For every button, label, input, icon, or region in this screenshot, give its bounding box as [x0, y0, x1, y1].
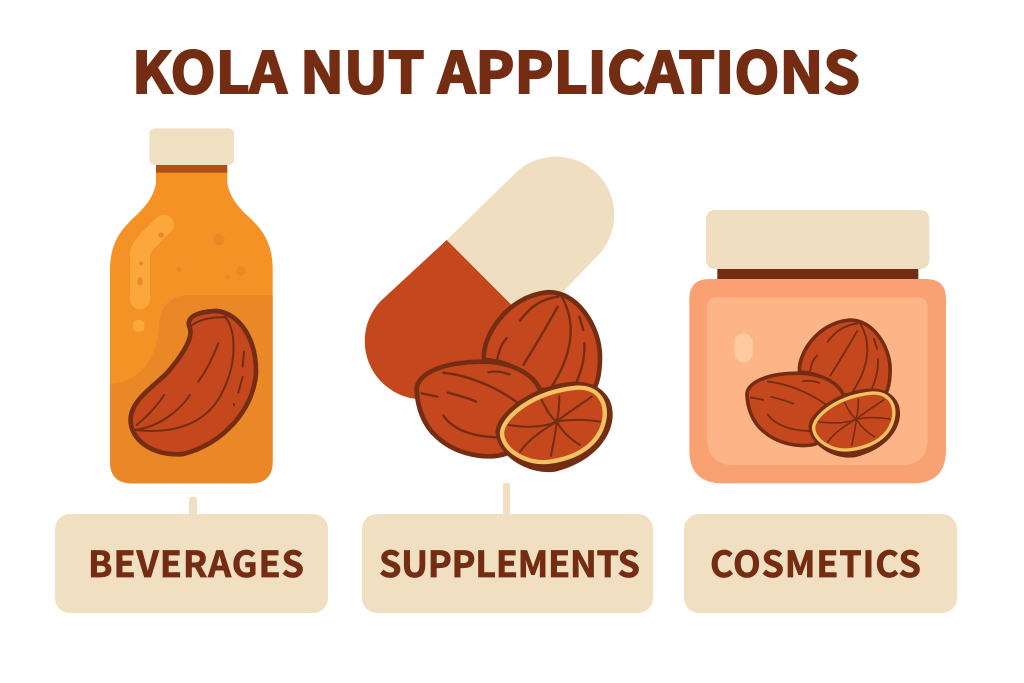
bottle cap — [149, 128, 234, 165]
left nut — [417, 362, 540, 456]
kola nut — [131, 311, 256, 454]
jar band — [717, 269, 918, 279]
jar inner panel — [707, 297, 928, 465]
capsule cream half — [447, 157, 614, 305]
title: KOLA NUT APPLICATIONS — [132, 28, 860, 110]
back nut — [484, 292, 600, 390]
connector: supplements — [503, 483, 510, 517]
bottle band — [156, 165, 227, 173]
bottle highlight — [140, 225, 164, 299]
connector: beverages — [189, 497, 197, 517]
cut nut — [495, 382, 613, 472]
label: cosmetics: COSMETICS — [710, 536, 921, 588]
bottle body — [110, 172, 273, 483]
label: supplements — [362, 514, 653, 613]
kola nuts group — [417, 292, 613, 472]
small highlight — [133, 320, 144, 332]
icon: beverage bottle — [110, 128, 273, 483]
jar body — [689, 279, 946, 483]
icon: supplement capsule with nuts — [365, 157, 614, 472]
label: supplements: SUPPLEMENTS — [379, 536, 640, 588]
bottle liquid shade — [110, 295, 273, 483]
label: beverages: BEVERAGES — [88, 536, 304, 588]
bottle speckles — [137, 232, 245, 286]
jar kola nuts — [747, 320, 900, 458]
jar highlight — [734, 333, 753, 362]
capsule red half — [365, 240, 537, 399]
label: cosmetics — [684, 514, 957, 613]
jar lid — [706, 210, 929, 269]
icon: cosmetics jar — [689, 210, 946, 483]
label: beverages — [55, 514, 328, 613]
